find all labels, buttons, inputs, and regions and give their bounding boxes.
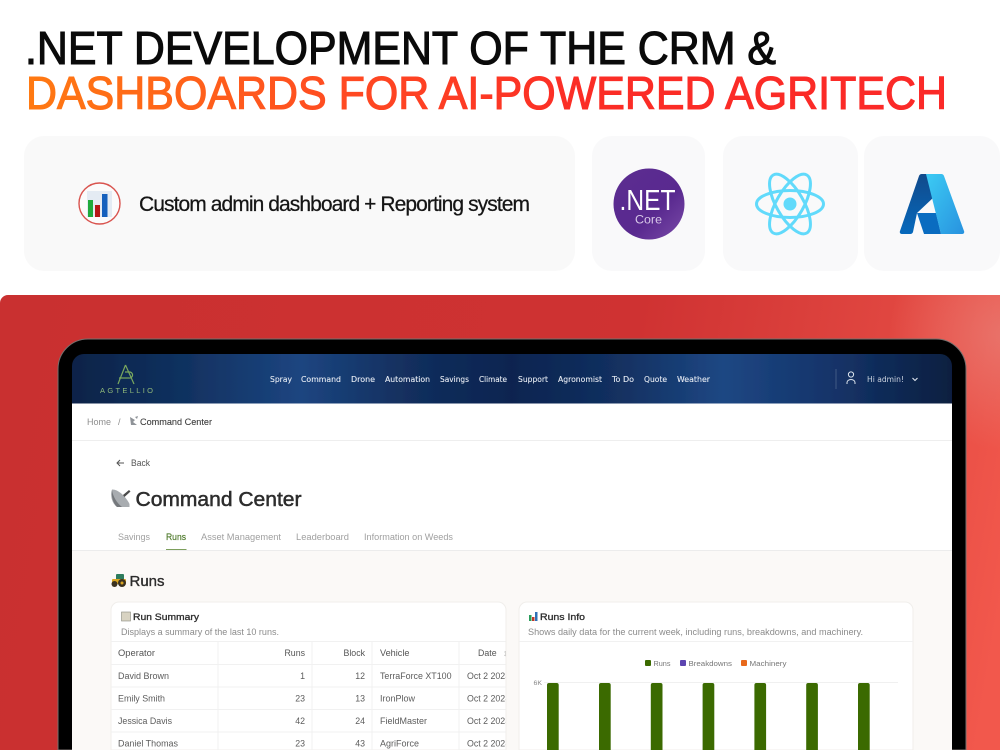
navigation links: Spray	[270, 375, 293, 384]
table header: ↕	[503, 648, 507, 658]
row: Jessica Davis: Jessica Davis	[118, 716, 173, 726]
panel: run summary table	[111, 602, 510, 750]
row: Jessica Davis	[118, 718, 506, 724]
row: Jessica Davis: 24	[355, 716, 365, 726]
row: Daniel Thomas: AgriForce	[380, 738, 419, 748]
user menu: Hi admin!	[867, 375, 904, 384]
heading: Run Summary: Run Summary	[133, 612, 199, 623]
legend: Breakdowns	[688, 659, 732, 668]
legend: Runs	[654, 659, 671, 668]
navigation links: Agronomist	[558, 375, 602, 384]
navigation links: Command	[301, 375, 341, 384]
icon: tractor	[112, 574, 126, 587]
icon: ledger	[122, 612, 130, 621]
navigation links	[270, 376, 710, 384]
navigation links: Weather	[677, 375, 711, 384]
heading: Runs Info: Runs Info	[540, 612, 585, 623]
breadcrumb: Command Center	[140, 417, 212, 427]
table header: Runs	[284, 648, 306, 658]
navigation links: Savings	[440, 375, 469, 384]
logo: Agtellio	[100, 365, 153, 395]
page body	[72, 404, 952, 550]
panel: .NET Core	[592, 136, 705, 271]
navigation links: Climate	[479, 375, 507, 384]
row: Daniel Thomas: Oct 2 2024	[467, 738, 510, 748]
tabs: Leaderboard	[296, 532, 349, 542]
back link: Back	[131, 458, 150, 468]
row: Daniel Thomas: 43	[355, 738, 365, 748]
panel: custom admin dashboard	[24, 136, 575, 271]
laptop mockup	[58, 339, 966, 750]
row: David Brown: 1	[300, 671, 305, 681]
row: Emily Smith: IronPlow	[380, 694, 416, 704]
navigation links: Automation	[385, 375, 430, 384]
legend: Machinery	[750, 659, 787, 668]
row: Daniel Thomas: Daniel Thomas	[118, 738, 179, 748]
panel: React	[723, 136, 858, 271]
table header: Operator	[118, 648, 155, 658]
title: DASHBOARDS FOR AI-POWERED AGRITECH	[26, 67, 947, 119]
section heading: Runs	[112, 574, 164, 587]
panel: runs info chart	[519, 602, 913, 750]
tabs	[118, 532, 453, 550]
table header: Block	[343, 648, 366, 658]
navigation links: Support	[518, 375, 548, 384]
title	[25, 22, 947, 119]
tabs: Asset Management	[201, 532, 282, 542]
text: dashboard description: Custom admin dashboard + Reporting system	[139, 193, 530, 216]
row: Jessica Davis: 42	[295, 716, 305, 726]
table header: Date	[478, 648, 497, 658]
navigation links: Drone	[351, 375, 375, 384]
row: Emily Smith: Oct 2 2024	[467, 694, 510, 704]
row: Emily Smith	[118, 695, 506, 704]
panel: red showcase background	[0, 295, 1000, 750]
title: .NET DEVELOPMENT OF THE CRM &	[25, 22, 776, 74]
row: Emily Smith: 13	[355, 694, 365, 704]
row: Emily Smith: 23	[295, 694, 305, 704]
tabs: Savings	[118, 532, 150, 542]
icon: .NET Core logo: .NET	[620, 185, 676, 217]
text: description: Shows daily data for the current week, including runs, breakdowns, and machinery.	[528, 627, 863, 637]
tab: Runs active	[166, 532, 186, 550]
breadcrumb	[88, 416, 212, 425]
row: David Brown: TerraForce XT100	[380, 671, 452, 681]
table header	[118, 650, 506, 658]
bars: runs	[547, 683, 870, 750]
row: Daniel Thomas	[118, 740, 506, 748]
panel: Azure	[864, 136, 1000, 271]
navigation links: To Do	[611, 375, 634, 384]
breadcrumb: /	[118, 417, 121, 427]
breadcrumb: Home	[87, 417, 111, 427]
row: David Brown: 12	[355, 671, 365, 681]
user menu	[836, 369, 918, 389]
table	[111, 642, 510, 750]
section heading: Runs: Runs	[130, 574, 164, 590]
tabs: Information on Weeds	[364, 532, 453, 542]
table header: Vehicle	[380, 648, 410, 658]
text: description: Displays a summary of the last 10 runs.	[121, 627, 279, 637]
row: Emily Smith: Emily Smith	[118, 694, 165, 704]
back link	[116, 460, 150, 466]
navigation links: Quote	[644, 375, 667, 384]
icon: satellite dish	[111, 489, 130, 507]
page heading: Command Center: Command Center	[136, 489, 302, 511]
axis label: 6K	[534, 680, 543, 687]
icon: .NET Core logo: Core	[635, 212, 662, 226]
page heading: Command Center	[111, 490, 302, 507]
row: David Brown: Oct 2 2024	[467, 671, 510, 681]
icon: .NET Core logo	[614, 168, 684, 240]
logo: Agtellio: AGTELLIO	[100, 386, 153, 395]
icon: small bar chart	[529, 612, 538, 621]
row: Daniel Thomas: 23	[295, 738, 305, 748]
icon: Azure logo	[900, 174, 964, 234]
row: David Brown	[118, 672, 506, 679]
legend	[645, 660, 786, 668]
tab: Runs active: Runs	[166, 532, 186, 542]
icon: bar chart in circle	[79, 183, 120, 224]
row: Jessica Davis: FieldMaster	[380, 716, 427, 726]
row: David Brown: David Brown	[118, 671, 169, 681]
icon: React logo	[756, 168, 824, 240]
navigation bar	[72, 354, 952, 404]
row: Jessica Davis: Oct 2 2024	[467, 716, 510, 726]
